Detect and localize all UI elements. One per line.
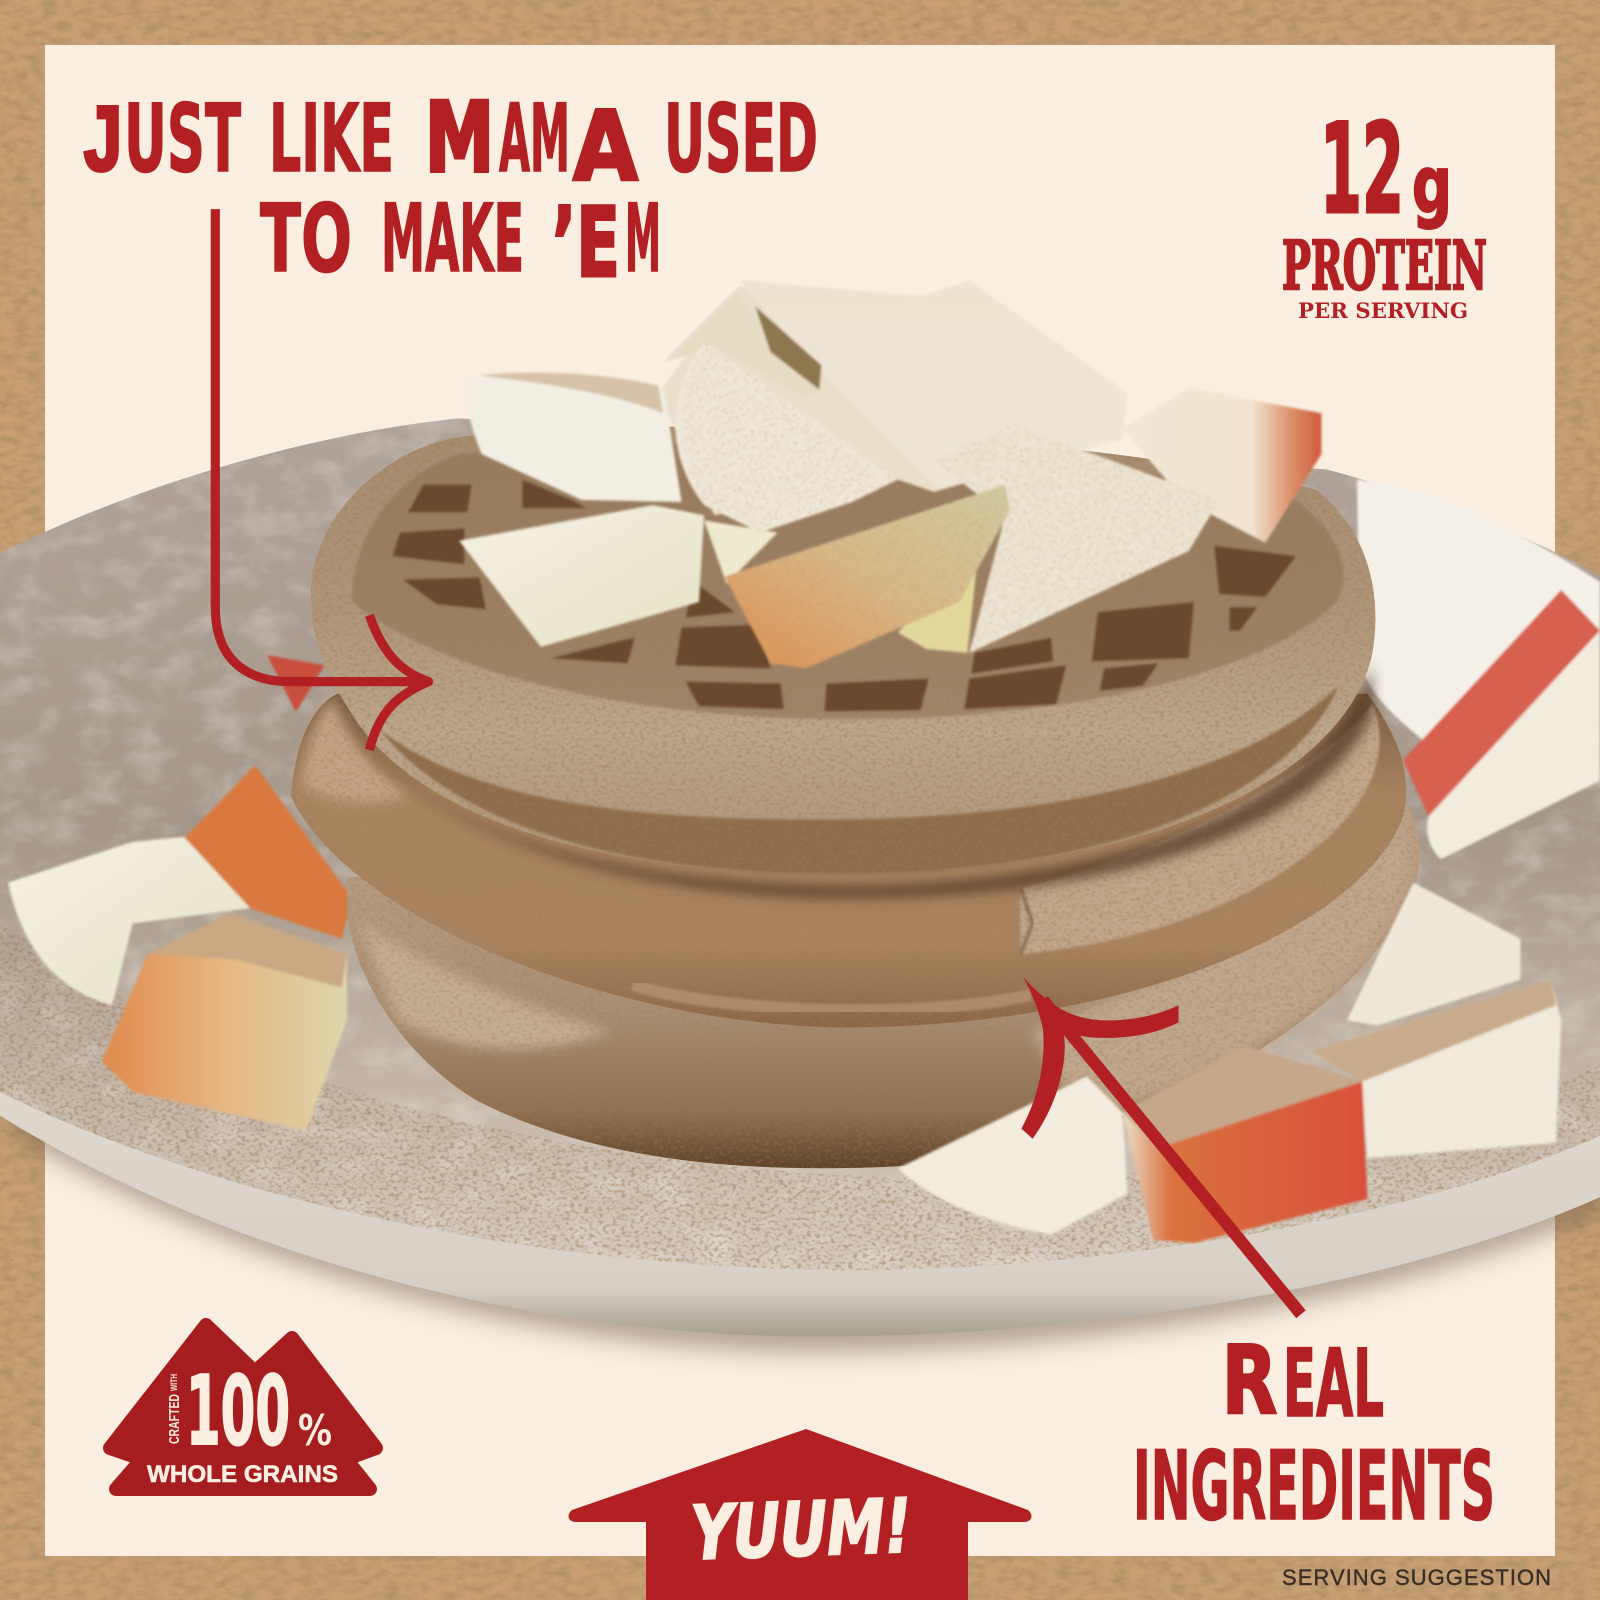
per serving: PER SERVING — [1298, 298, 1468, 323]
letter R: R — [1222, 1327, 1277, 1436]
100: 100 — [186, 1357, 290, 1467]
headline word: to: TO — [260, 185, 352, 294]
cinnamon dust on apples — [681, 342, 1219, 668]
apple pieces on top of stack — [459, 281, 1321, 668]
top waffle — [311, 427, 1375, 898]
middle waffle — [291, 694, 1406, 1028]
serving suggestion note: SERVING SUGGESTION — [1282, 1565, 1551, 1590]
apple slices behind stack, right — [1357, 480, 1600, 859]
apple slices, left — [8, 655, 352, 1131]
plate rim — [0, 1090, 1600, 1337]
percent: % — [298, 1406, 332, 1455]
bottom waffle light edge — [1031, 827, 1410, 1122]
headline word: like: LIKE — [269, 85, 394, 194]
badge: 100% whole grains — [110, 1325, 376, 1489]
headline apostrophe and E: ’E — [552, 187, 620, 299]
arrow: to waffle — [215, 209, 429, 750]
yuum arrow badge — [569, 1429, 1031, 1600]
with: WITH — [169, 1374, 179, 1391]
headline letter: J: J — [84, 88, 122, 190]
headline — [84, 82, 818, 299]
apple pieces, front right — [898, 883, 1561, 1243]
crafted with: CRAFTED — [166, 1394, 183, 1444]
headline letter: M: M — [425, 82, 494, 194]
headline: MAKE — [381, 185, 524, 294]
letters EAL: EAL — [1283, 1330, 1384, 1439]
arrow: to ingredients — [1021, 978, 1301, 1314]
protein callout: 12 — [1320, 98, 1404, 242]
headline letter: A: A — [573, 91, 638, 203]
headline word: used: USED — [664, 85, 818, 194]
real ingredients label — [1133, 1327, 1495, 1542]
headline: M — [625, 185, 661, 294]
plate — [0, 418, 1600, 1337]
mountain shape — [110, 1325, 376, 1489]
g: g — [1412, 141, 1452, 231]
arrow shape — [569, 1429, 1031, 1600]
cinnamon dust on plate — [0, 918, 1600, 1270]
whole grains: WHOLE GRAINS — [147, 1461, 338, 1488]
headline letters: UST: UST — [124, 85, 241, 194]
food photo: waffles with apples on a plate — [0, 209, 1600, 1352]
plate shadow — [0, 1122, 1600, 1352]
yuum text: YUUM! — [690, 1483, 912, 1577]
protein callout — [1282, 98, 1487, 323]
bottom waffle — [347, 806, 1420, 1168]
top waffle underside — [380, 686, 1339, 874]
top waffle recessed face — [352, 444, 1343, 719]
waffle grid wells — [393, 480, 1296, 711]
headline: AM — [499, 85, 570, 194]
